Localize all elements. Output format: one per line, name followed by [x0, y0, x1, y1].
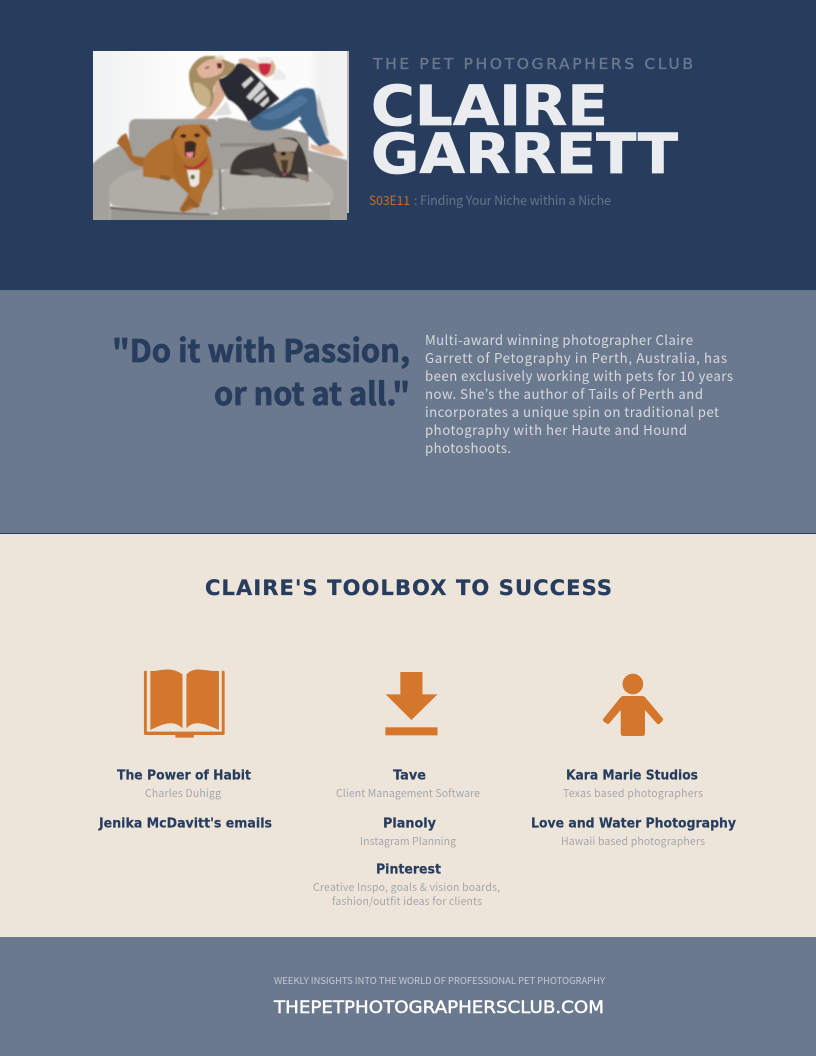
panel: quote and bio [0, 290, 816, 533]
icon: open book [144, 669, 225, 738]
column: photographers: Kara Marie Studios [566, 768, 698, 784]
column: software: Pinterest [376, 862, 442, 878]
title: guest name: CLAIRE [371, 74, 608, 138]
photo: Claire Garrett with two dogs on a sofa [93, 51, 349, 220]
title: guest name: GARRETT [371, 122, 679, 186]
column: photographers: Hawaii based photographers [561, 834, 705, 849]
episode label: : Finding Your Niche within a Niche [414, 190, 611, 209]
biography text [425, 330, 733, 457]
column: software: fashion/outfit ideas for clients [332, 894, 482, 909]
heading: toolbox: CLAIRE'S TOOLBOX TO SUCCESS [205, 576, 612, 600]
pull quote: "Do it with Passion, [112, 326, 410, 371]
dark dog [230, 137, 308, 182]
pull quote [112, 326, 410, 414]
pull quote: or not at all." [214, 369, 410, 414]
biography text: photoshoots. [425, 438, 511, 457]
footer website: THEPETPHOTOGRAPHERSCLUB.COM [273, 998, 604, 1017]
biography text: been exclusively working with pets for 10 years [425, 366, 733, 385]
column: software: Planoly [383, 816, 436, 832]
column: books and emails: The Power of Habit [117, 768, 251, 784]
eyebrow: podcast name: THE PET PHOTOGRAPHERS CLUB [372, 55, 693, 73]
column: books and emails [98, 768, 272, 832]
column: photographers [531, 768, 736, 849]
icon: download arrow [385, 672, 437, 735]
column: software: Creative Inspo, goals & vision boards, [313, 880, 500, 895]
column: software [313, 768, 500, 909]
woman [189, 55, 326, 136]
column: software: Tave [393, 768, 426, 784]
brown dog [117, 124, 213, 212]
episode label: S03E11 [369, 190, 410, 209]
biography text: photography with her Haute and Hound [425, 420, 687, 439]
panel: footer [0, 937, 816, 1056]
biography text: Garrett of Petography in Perth, Australia, has [425, 348, 727, 367]
panel: toolbox [0, 533, 816, 937]
biography text: now. She’s the author of Tails of Perth and [425, 384, 703, 403]
title: guest name [371, 74, 679, 186]
column: software: Instagram Planning [360, 834, 456, 849]
footer tagline: WEEKLY INSIGHTS INTO THE WORLD OF PROFESSIONAL PET PHOTOGRAPHY [274, 973, 606, 987]
column: software: Client Management Software [336, 786, 480, 801]
column: books and emails: Jenika McDavitt's emails [98, 816, 272, 832]
biography text: incorporates a unique spin on traditional pet [425, 402, 719, 421]
icon: person [603, 674, 663, 736]
biography text: Multi-award winning photographer Claire [425, 330, 693, 349]
panel: header [93, 51, 692, 220]
lower leg and foot [298, 120, 344, 156]
column: photographers: Love and Water Photography [531, 816, 736, 832]
column: photographers: Texas based photographers [563, 786, 703, 801]
column: books and emails: Charles Duhigg [145, 786, 221, 801]
